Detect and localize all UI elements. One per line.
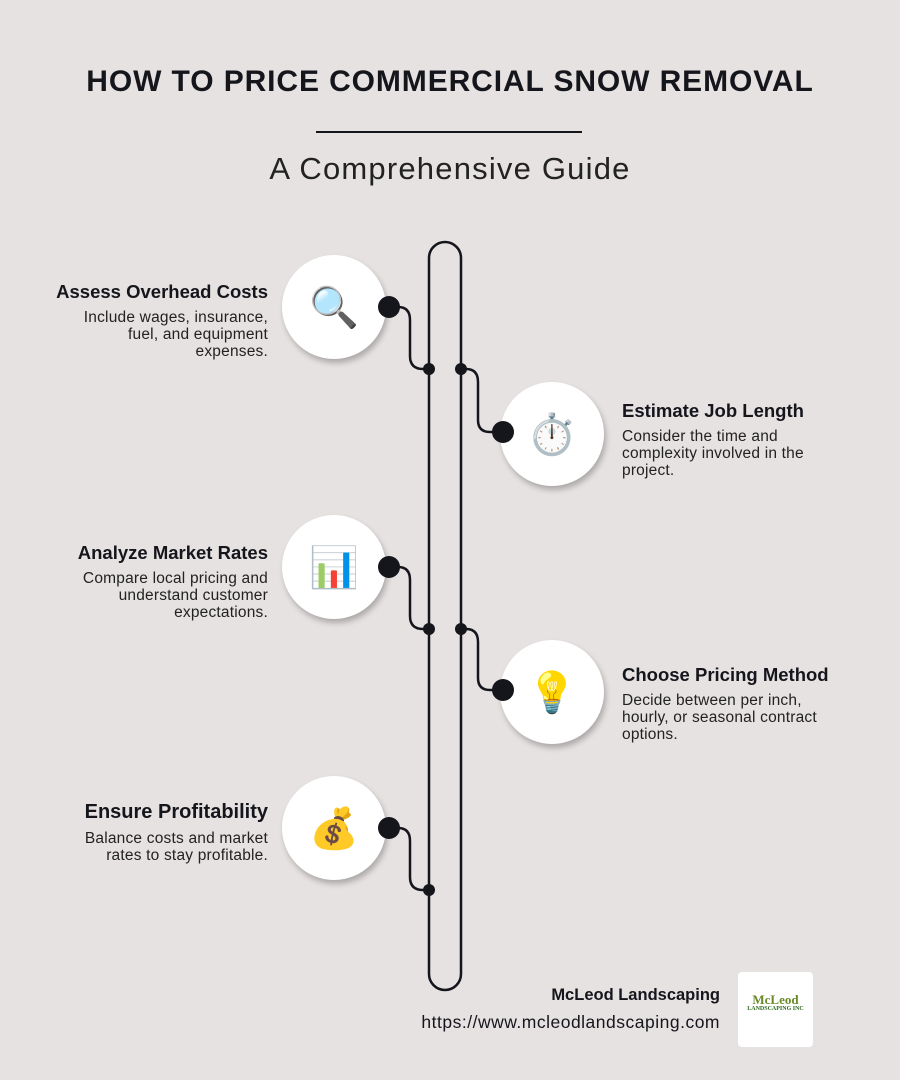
step 3 icon: chart — [282, 515, 386, 619]
step 4 icon: bulb — [500, 640, 604, 744]
divider — [316, 131, 582, 133]
step 1 text: Assess Overhead Costs — [56, 281, 268, 302]
step 4 node — [492, 679, 514, 701]
step 2 text: Consider the time and complexity involved in the project. — [622, 428, 804, 479]
step 2 icon: stopwatch: ⏱️ — [527, 412, 577, 458]
step 2 icon: stopwatch — [500, 382, 604, 486]
step 5 icon: money bag — [282, 776, 386, 880]
step 1 text: Include wages, insurance, fuel, and equipment expenses. — [84, 309, 268, 360]
step 3 icon: chart: 📊 — [309, 544, 359, 590]
logo: McLeod — [752, 992, 799, 1007]
step 2 text: Estimate Job Length — [622, 400, 804, 421]
step 4 text — [622, 664, 829, 743]
step 5 icon: money bag: 💰 — [309, 806, 359, 852]
step 3 text: Analyze Market Rates — [78, 542, 268, 563]
footer company: https://www.mcleodlandscaping.com — [421, 1012, 720, 1032]
step 5 node — [378, 817, 400, 839]
step 1 text — [56, 281, 268, 360]
step 3 text — [78, 542, 268, 621]
step 5 text: Balance costs and market rates to stay profitable. — [85, 830, 268, 864]
step 5 text — [85, 801, 268, 864]
step 1 node — [378, 296, 400, 318]
title: HOW TO PRICE COMMERCIAL SNOW REMOVAL — [86, 65, 814, 98]
step 4 icon: bulb: 💡 — [527, 670, 577, 716]
subtitle: A Comprehensive Guide — [269, 151, 631, 186]
step 2 node — [492, 421, 514, 443]
step 1 icon: magnifier — [282, 255, 386, 359]
step 4 text: Choose Pricing Method — [622, 664, 829, 685]
footer company — [421, 986, 720, 1032]
step 5 text: Ensure Profitability — [85, 801, 268, 823]
step 2 text — [622, 400, 804, 479]
footer company: McLeod Landscaping — [551, 986, 720, 1004]
step 3 text: Compare local pricing and understand customer expectations. — [83, 570, 268, 621]
step 4 text: Decide between per inch, hourly, or seasonal contract options. — [622, 692, 817, 743]
step 3 node — [378, 556, 400, 578]
step 1 icon: magnifier: 🔍 — [309, 284, 359, 330]
logo: LANDSCAPING INC — [747, 1006, 804, 1012]
logo — [738, 972, 813, 1047]
